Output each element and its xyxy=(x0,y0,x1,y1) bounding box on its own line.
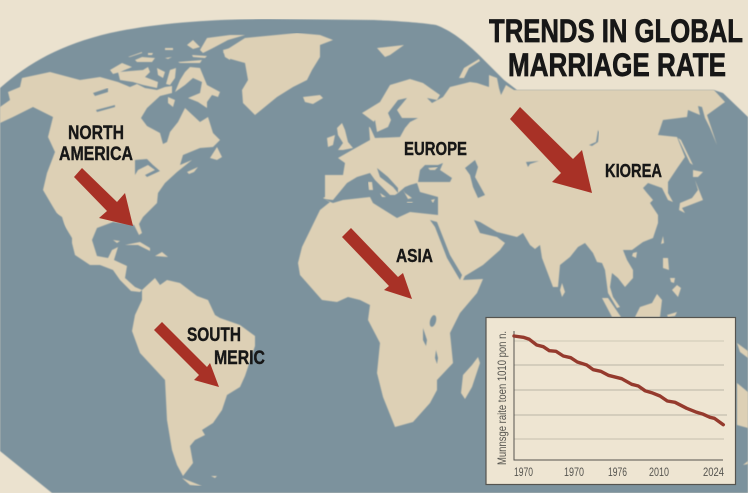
arrow: North America xyxy=(74,168,133,226)
land: Caribbean xyxy=(113,240,168,257)
inland seas and lakes xyxy=(56,88,599,364)
land: Iceland xyxy=(303,95,323,104)
panel: line chart xyxy=(486,318,736,484)
y axis label: Munnsge raite toen 1010 pon n. xyxy=(495,331,509,465)
land: Australia edge xyxy=(737,343,748,465)
chart line xyxy=(514,336,723,425)
land: Madagascar xyxy=(461,357,480,399)
sea: Caspian xyxy=(465,160,485,198)
land: South America xyxy=(132,278,255,476)
arrow: Africa xyxy=(342,228,412,299)
lakes: Central Asia xyxy=(526,130,599,167)
label: Asia: ASIA xyxy=(396,246,433,266)
x axis labels: 1976 xyxy=(608,465,627,479)
label: South America xyxy=(187,325,265,369)
sea: Gulf of California xyxy=(56,213,69,240)
arrow: Asia xyxy=(510,107,592,193)
label: North America xyxy=(59,123,133,165)
label: Europe: EUROPE xyxy=(404,139,467,159)
land: Afro-Eurasia xyxy=(298,75,725,427)
x axis labels: 2010 xyxy=(649,465,669,479)
land: Greenland xyxy=(223,33,333,115)
land on top of seas: Mediterranean islands xyxy=(368,167,438,203)
x axis labels xyxy=(514,465,724,479)
x axis labels: 1970 xyxy=(514,465,533,479)
sea: Baltic xyxy=(370,98,418,138)
sea: Red Sea xyxy=(430,220,462,280)
x axis labels: 1970 xyxy=(564,465,584,479)
land: Arctic islands xyxy=(110,35,245,174)
lakes: Africa xyxy=(423,314,438,364)
sea: Mediterranean xyxy=(323,173,438,218)
land: North America xyxy=(0,72,220,292)
sea: Adriatic xyxy=(377,168,398,193)
arrow: South America xyxy=(154,322,219,387)
chart axes xyxy=(514,331,723,460)
label: South America: MERIC xyxy=(214,348,265,369)
lakes: Great Lakes xyxy=(135,159,160,177)
x axis labels: 2024 xyxy=(703,465,724,479)
lakes: Canada xyxy=(93,88,115,112)
label: North America: AMERICA xyxy=(59,144,133,165)
land: Arctic Russia islands xyxy=(377,45,480,78)
title xyxy=(489,13,743,83)
label: Kiorea: KIOREA xyxy=(605,161,662,181)
land: British Isles xyxy=(327,123,353,150)
sea: Black Sea xyxy=(418,163,452,182)
label: North America: NORTH xyxy=(68,123,124,144)
label: South America: SOUTH xyxy=(187,325,241,346)
land: Asian islands xyxy=(560,138,703,317)
